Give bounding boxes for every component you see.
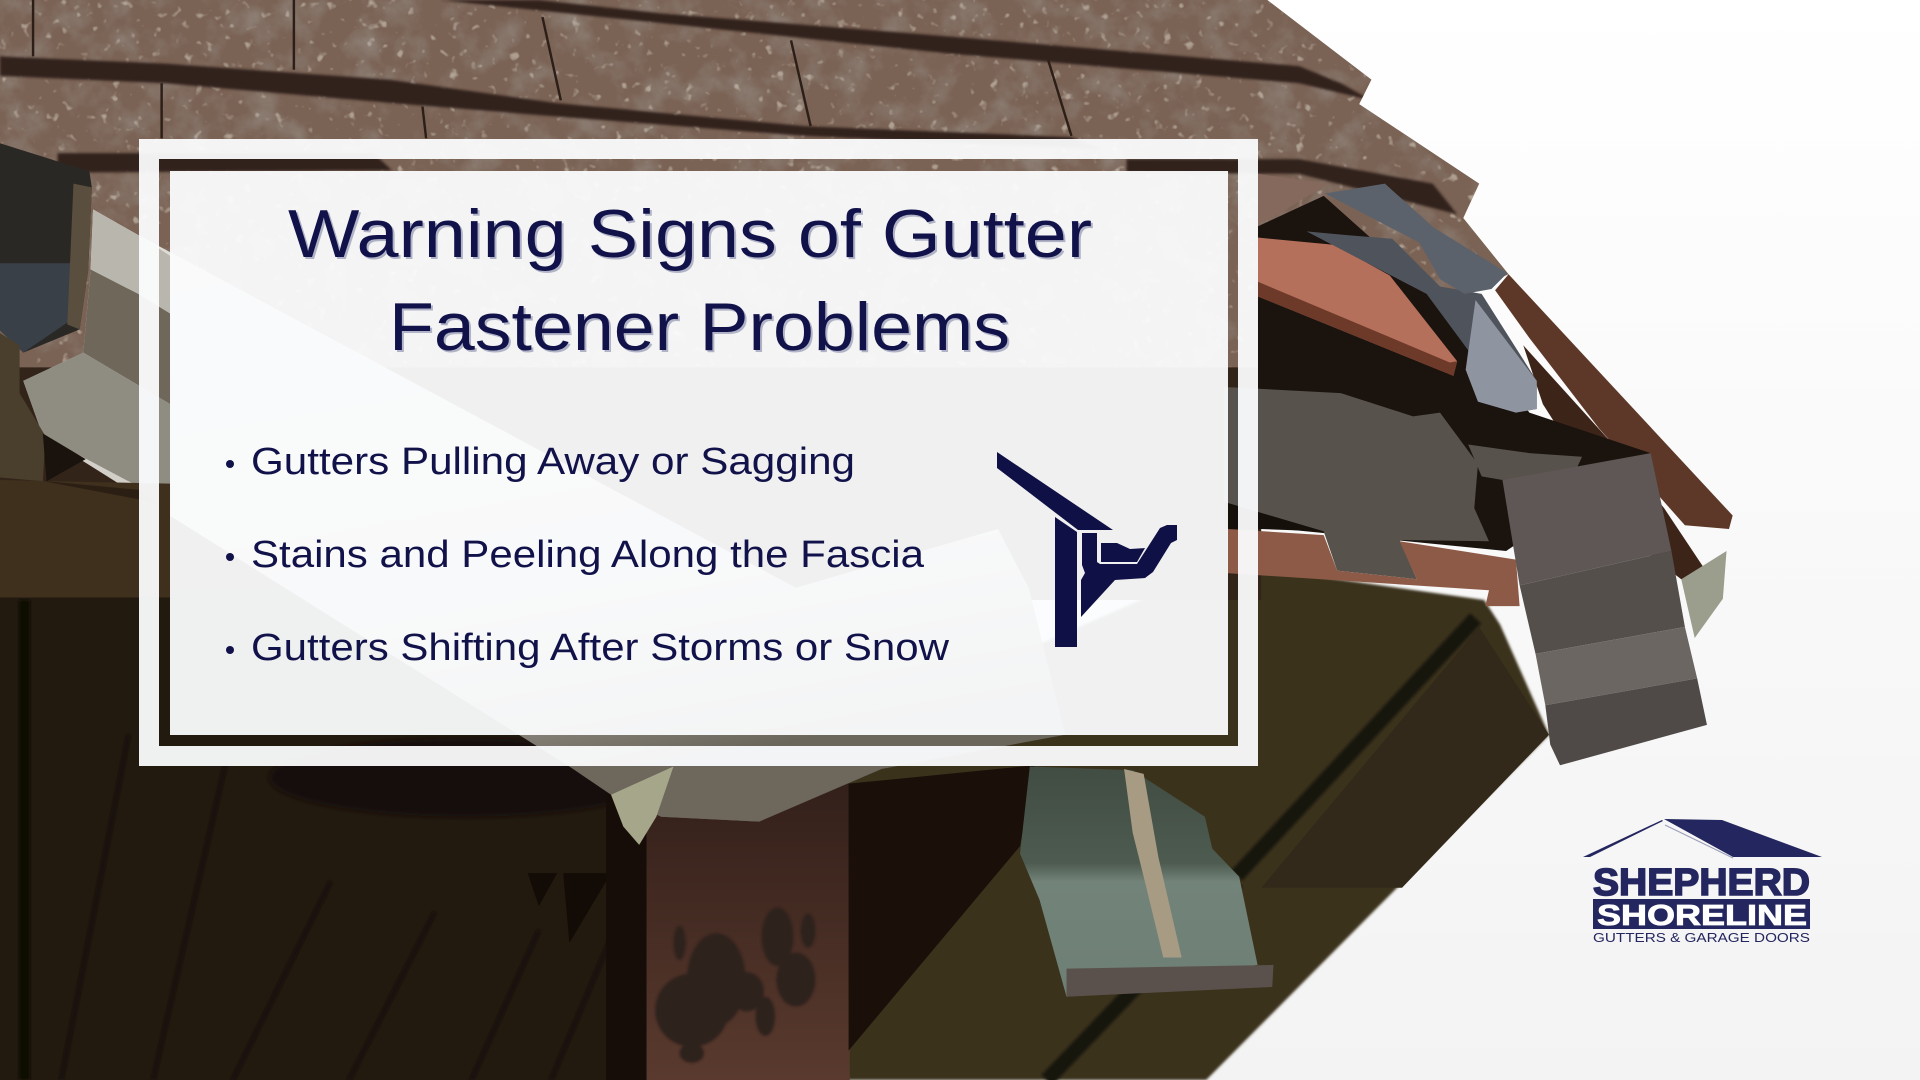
gutter outlet — [0, 143, 92, 353]
title — [288, 196, 1092, 365]
insulation — [1224, 387, 1582, 579]
dark recess by post — [849, 765, 1035, 1051]
gutter underside — [569, 767, 885, 822]
torn gutter piece — [611, 767, 673, 845]
panel inner card — [170, 171, 1228, 735]
logo tagline: GUTTERS & GARAGE DOORS — [1593, 931, 1810, 945]
title: Warning Signs of Gutter — [288, 196, 1092, 272]
underside notches — [528, 873, 611, 943]
logo name band: SHORELINE — [1597, 900, 1807, 932]
bullet list: Gutters Shifting After Storms or Snow — [251, 627, 950, 669]
roof tiles — [0, 0, 1592, 367]
soffit — [833, 563, 1549, 1080]
fascia board — [1227, 529, 1520, 606]
cavity — [1258, 196, 1651, 551]
bullet list: Gutters Pulling Away or Sagging — [251, 441, 855, 483]
insulation shadow — [1224, 502, 1324, 531]
hanging flashing — [1502, 453, 1707, 765]
title: Fastener Problems — [389, 289, 1010, 365]
debris — [1681, 551, 1727, 638]
eave board — [1495, 274, 1733, 529]
underside beam — [269, 738, 661, 817]
gutter body seen through panel — [23, 209, 1065, 822]
gutter top band — [91, 209, 170, 313]
soffit beams — [1047, 618, 1549, 1080]
felt layers — [1307, 184, 1537, 413]
panel: translucent white card — [139, 139, 1258, 766]
panel outer band — [139, 139, 1258, 766]
tile right of panel — [1258, 174, 1329, 223]
post — [606, 784, 850, 1080]
red tile — [1258, 238, 1457, 376]
left underside planks — [0, 588, 649, 1080]
logo name: SHEPHERD — [1593, 862, 1810, 904]
logo roof — [1583, 819, 1822, 858]
dark structure behind panel — [0, 343, 1261, 600]
gutter shaded side — [83, 269, 170, 404]
horizontal beam — [0, 480, 170, 598]
bracket piece — [0, 333, 45, 481]
icon: gutter on fascia — [997, 452, 1177, 647]
bullet list: Stains and Peeling Along the Fascia — [251, 534, 925, 576]
downspout — [1020, 767, 1273, 997]
gutter lower band — [23, 353, 170, 503]
bullet list — [226, 441, 950, 669]
logo: Shepherd Shoreline — [1583, 819, 1822, 945]
